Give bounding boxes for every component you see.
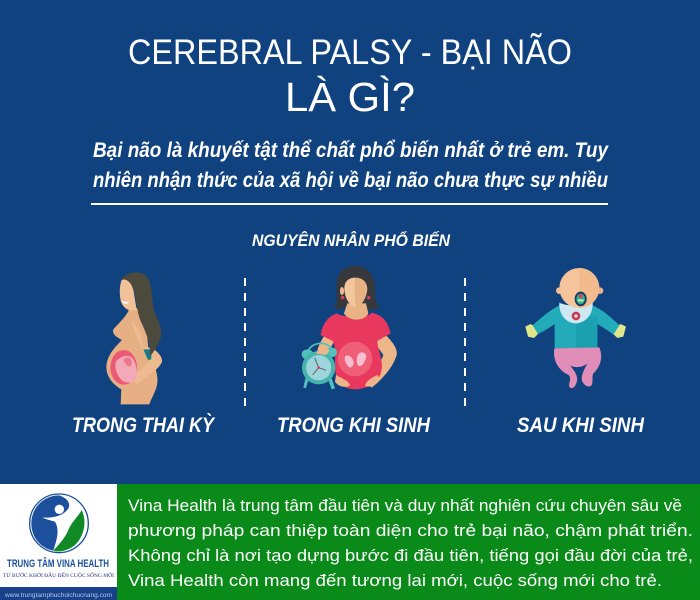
- panel: about: phương pháp can thiệp toàn diện cho trẻ bại não, chậm phát triển.: [128, 522, 693, 540]
- intro text: nhiên nhận thức của xã hội về bại não chưa thực sự nhiều: [93, 169, 608, 192]
- label: during pregnancy: TRONG THAI KỲ: [72, 414, 216, 437]
- logo name: TRUNG TÂM VINA HEALTH: [7, 557, 109, 570]
- label: after birth: SAU KHI SINH: [517, 414, 645, 437]
- panel: about: [117, 484, 700, 600]
- panel: about: Vina Health là trung tâm đầu tiên và duy nhất nghiên cứu chuyên sâu về: [128, 497, 682, 515]
- icon: pregnant woman: [106, 273, 162, 404]
- title: [128, 33, 572, 120]
- section heading: NGUYÊN NHÂN PHỔ BIẾN: [252, 231, 451, 250]
- logo website: www.trungtamphuchoichucnang.com: [4, 593, 112, 599]
- title: LÀ GÌ?: [285, 74, 415, 120]
- icon: baby: [525, 268, 626, 388]
- panel: about: Vina Health còn mang đến tương lai mới, cuộc sống mới cho trẻ.: [128, 572, 662, 590]
- title: CEREBRAL PALSY - BẠI NÃO: [128, 33, 572, 72]
- panel: logo: [0, 484, 117, 600]
- label: during birth: TRONG KHI SINH: [277, 414, 431, 437]
- intro text: Bại não là khuyết tật thể chất phổ biến nhất ở trẻ em. Tuy: [93, 139, 609, 162]
- icon: mother with clock: [302, 266, 397, 389]
- intro text: [93, 139, 609, 192]
- logo emblem: [30, 494, 88, 553]
- panel: about: Không chỉ là nơi tạo dựng bước đi đầu tiên, tiếng gọi đầu đời của trẻ,: [128, 547, 693, 565]
- logo tagline: TỪ BƯỚC KHỞI ĐẦU ĐẾN CUỘC SỐNG MỚI: [3, 573, 114, 579]
